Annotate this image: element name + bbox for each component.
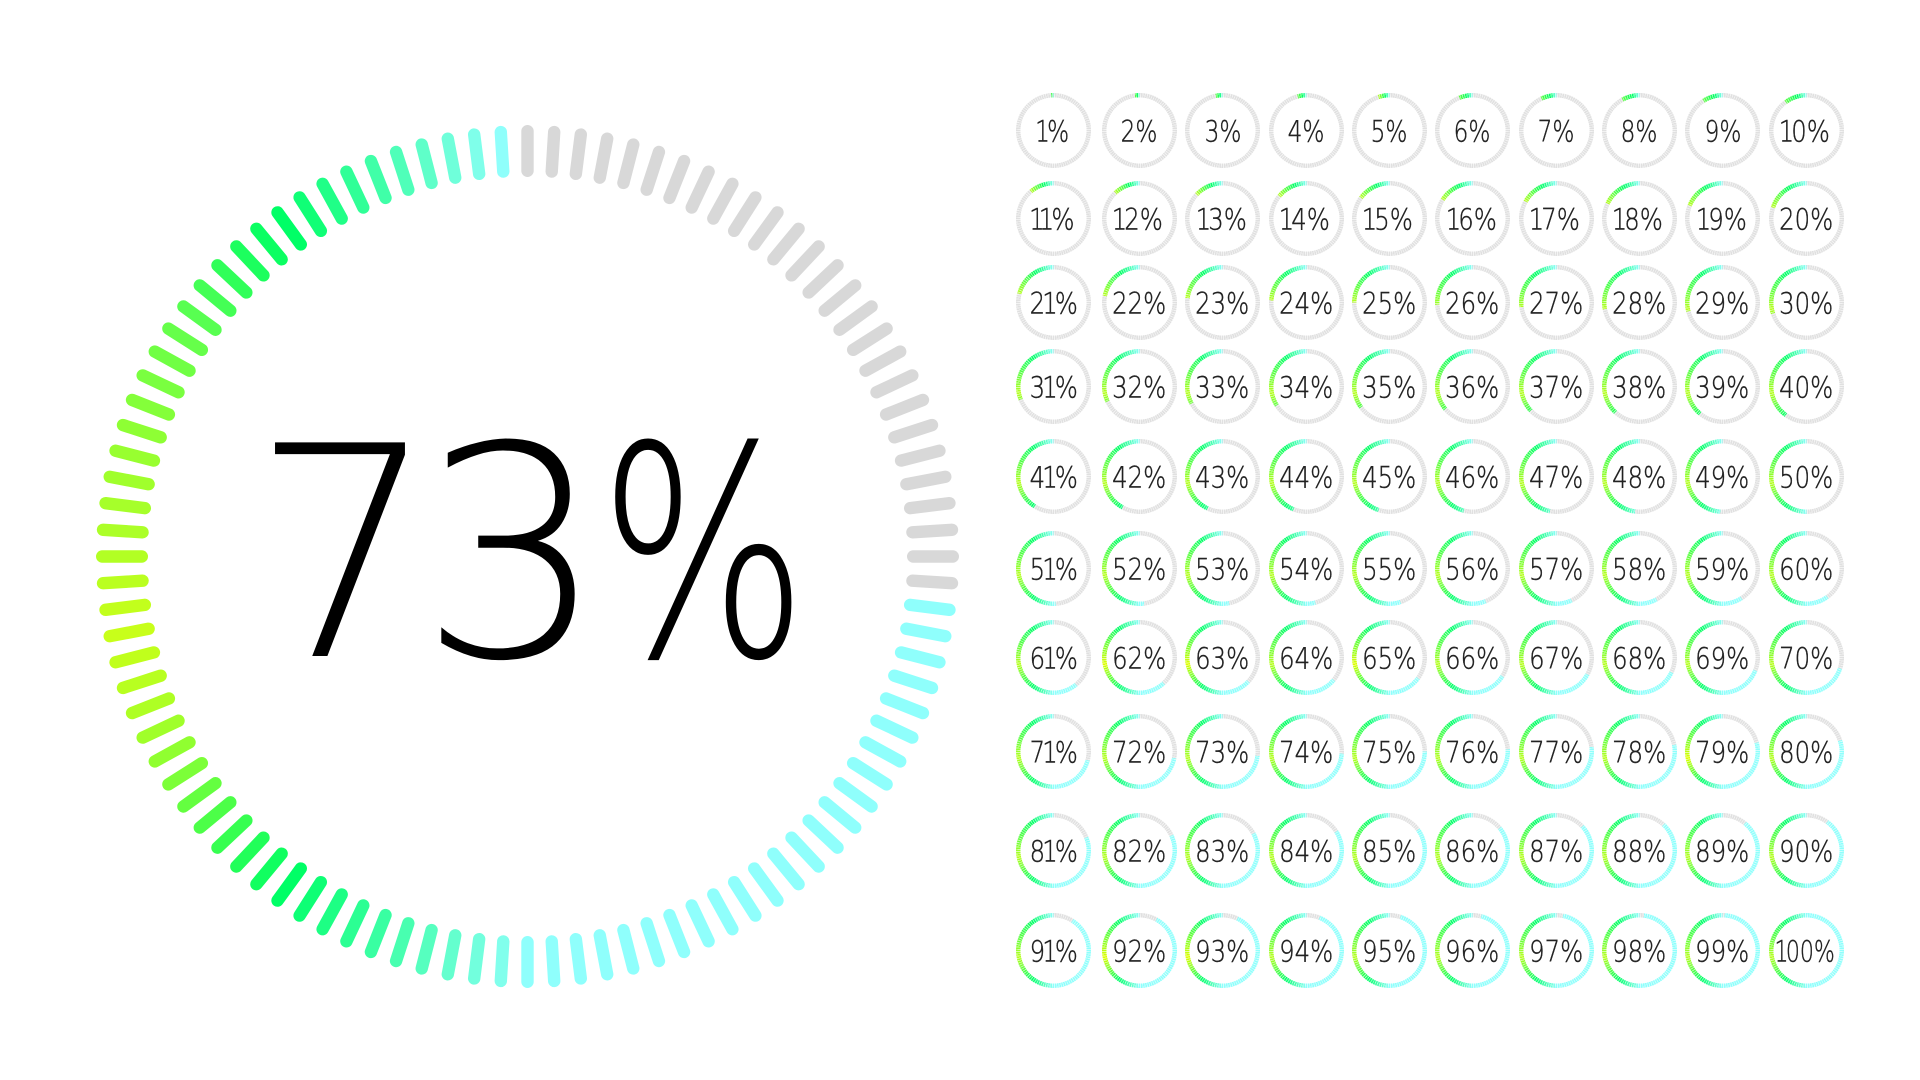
gauge 69%: 69%	[1696, 642, 1750, 676]
gauge 8%: 8%	[1621, 115, 1657, 149]
gauge 16%: 16%	[1445, 202, 1497, 236]
gauge 42%: 42%	[1112, 460, 1166, 494]
gauge 91%: 91%	[1030, 934, 1078, 968]
gauge 74%	[1268, 714, 1344, 789]
gauge 96%	[1435, 912, 1510, 988]
gauge 60%	[1768, 530, 1844, 606]
gauge 30%: 30%	[1779, 286, 1833, 320]
gauge grid: 1% to 100%	[1016, 93, 1844, 988]
gauge 81%: 81%	[1030, 834, 1078, 868]
gauge 56%	[1435, 530, 1510, 606]
large value: 73%	[251, 385, 808, 726]
gauge 53%: 53%	[1196, 552, 1250, 586]
gauge 27%	[1518, 265, 1594, 340]
gauge 37%: 37%	[1529, 370, 1583, 404]
gauge 84%: 84%	[1279, 834, 1333, 868]
gauge 61%: 61%	[1030, 642, 1078, 676]
gauge 73%	[1185, 714, 1260, 789]
gauge 53%	[1185, 530, 1260, 606]
gauge 18%: 18%	[1612, 202, 1663, 236]
gauge 30%	[1768, 265, 1844, 340]
gauge 1%	[1016, 93, 1091, 168]
gauge 99%	[1685, 912, 1760, 988]
gauge 28%	[1602, 265, 1676, 340]
gauge 48%	[1602, 438, 1676, 514]
gauge 31%: 31%	[1030, 370, 1078, 404]
gauge 47%: 47%	[1529, 460, 1583, 494]
gauge 24%: 24%	[1279, 286, 1333, 320]
gauge 99%: 99%	[1696, 934, 1750, 968]
gauge 81%	[1016, 812, 1091, 888]
large value: 73%: %	[599, 386, 808, 726]
gauge 71%: 71%	[1030, 736, 1078, 770]
gauge 29%: 29%	[1696, 286, 1750, 320]
gauge 59%	[1685, 530, 1760, 606]
gauge 78%: 78%	[1612, 736, 1666, 770]
gauge 66%	[1435, 620, 1510, 695]
gauge 59%: 59%	[1696, 552, 1750, 586]
gauge 12%	[1102, 180, 1176, 256]
gauge 7%	[1518, 93, 1594, 168]
gauge 76%	[1435, 714, 1510, 789]
gauge 57%: 57%	[1529, 552, 1583, 586]
gauge 100%: 100%	[1774, 934, 1835, 968]
gauge 37%	[1518, 348, 1594, 424]
gauge 5%	[1352, 93, 1426, 168]
gauge 80%: 80%	[1779, 736, 1833, 770]
gauge 70%: 70%	[1779, 642, 1833, 676]
gauge 91%	[1016, 912, 1091, 988]
gauge 66%: 66%	[1445, 642, 1500, 676]
gauge 47%	[1518, 438, 1594, 514]
gauge 9%	[1685, 93, 1760, 168]
gauge 57%	[1518, 530, 1594, 606]
gauge 24%	[1268, 265, 1344, 340]
gauge 74%: 74%	[1279, 736, 1333, 770]
gauge 36%	[1435, 348, 1510, 424]
gauge 20%	[1768, 180, 1844, 256]
gauge 97%	[1518, 912, 1594, 988]
gauge 17%	[1518, 180, 1594, 256]
gauge 35%	[1352, 348, 1426, 424]
gauge 63%: 63%	[1196, 642, 1250, 676]
gauge 56%: 56%	[1445, 552, 1500, 586]
gauge 51%: 51%	[1030, 552, 1078, 586]
gauge 4%	[1268, 93, 1344, 168]
gauge 90%	[1768, 812, 1844, 888]
gauge 32%	[1102, 348, 1176, 424]
gauge 67%	[1518, 620, 1594, 695]
gauge 15%	[1352, 180, 1426, 256]
gauge 43%	[1185, 438, 1260, 514]
gauge 86%	[1435, 812, 1510, 888]
gauge 26%	[1435, 265, 1510, 340]
gauge 68%	[1602, 620, 1676, 695]
gauge 10%	[1768, 93, 1844, 168]
gauge 86%: 86%	[1445, 834, 1500, 868]
gauge 4%: 4%	[1288, 115, 1324, 149]
gauge 64%: 64%	[1279, 642, 1333, 676]
gauge 27%: 27%	[1529, 286, 1583, 320]
gauge 55%	[1352, 530, 1426, 606]
gauge 16%	[1435, 180, 1510, 256]
gauge 15%: 15%	[1362, 202, 1413, 236]
gauge 34%: 34%	[1279, 370, 1333, 404]
gauge 3%	[1185, 93, 1260, 168]
gauge 52%: 52%	[1112, 552, 1166, 586]
gauge 87%: 87%	[1529, 834, 1583, 868]
gauge 33%: 33%	[1196, 370, 1250, 404]
gauge 40%: 40%	[1779, 370, 1833, 404]
gauge 75%: 75%	[1362, 736, 1416, 770]
gauge 60%: 60%	[1779, 552, 1833, 586]
gauge 10%: 10%	[1779, 115, 1830, 149]
gauge 92%	[1102, 912, 1176, 988]
gauge 87%	[1518, 812, 1594, 888]
gauge 72%	[1102, 714, 1176, 789]
gauge 21%: 21%	[1030, 286, 1078, 320]
gauge 33%	[1185, 348, 1260, 424]
gauge 54%: 54%	[1279, 552, 1333, 586]
gauge 2%: 2%	[1121, 115, 1157, 149]
gauge 54%	[1268, 530, 1344, 606]
gauge 79%	[1685, 714, 1760, 789]
gauge 46%	[1435, 438, 1510, 514]
gauge 72%: 72%	[1112, 736, 1166, 770]
gauge 55%: 55%	[1362, 552, 1416, 586]
gauge 45%: 45%	[1362, 460, 1416, 494]
large value: 73%: 7	[251, 385, 437, 726]
gauge 52%	[1102, 530, 1176, 606]
gauge 19%	[1685, 180, 1760, 256]
gauge 29%	[1685, 265, 1760, 340]
gauge 51%	[1016, 530, 1091, 606]
large gauge: 73 percent	[96, 125, 959, 988]
gauge 41%: 41%	[1030, 460, 1078, 494]
gauge 88%	[1602, 812, 1676, 888]
gauge 76%: 76%	[1445, 736, 1500, 770]
gauge 82%	[1102, 812, 1176, 888]
gauge 23%: 23%	[1196, 286, 1250, 320]
gauge 42%	[1102, 438, 1176, 514]
gauge 17%: 17%	[1529, 202, 1580, 236]
gauge 48%: 48%	[1612, 460, 1666, 494]
gauge 90%: 90%	[1779, 834, 1833, 868]
gauge 22%	[1102, 265, 1176, 340]
gauge 96%: 96%	[1445, 934, 1500, 968]
gauge 8%	[1602, 93, 1676, 168]
gauge 38%	[1602, 348, 1676, 424]
gauge 65%	[1352, 620, 1426, 695]
gauge 14%	[1268, 180, 1344, 256]
gauge 92%: 92%	[1112, 934, 1166, 968]
gauge 39%: 39%	[1696, 370, 1750, 404]
gauge 36%: 36%	[1445, 370, 1500, 404]
gauge 12%: 12%	[1112, 202, 1163, 236]
gauge 5%: 5%	[1371, 115, 1407, 149]
gauge 19%: 19%	[1696, 202, 1747, 236]
gauge 2%	[1102, 93, 1176, 168]
gauge 94%	[1268, 912, 1344, 988]
gauge 77%	[1518, 714, 1594, 789]
gauge 89%: 89%	[1696, 834, 1750, 868]
gauge 31%	[1016, 348, 1091, 424]
gauge 98%	[1602, 912, 1676, 988]
gauge 85%: 85%	[1362, 834, 1416, 868]
gauge 75%	[1352, 714, 1426, 789]
gauge 82%: 82%	[1112, 834, 1166, 868]
gauge 58%: 58%	[1612, 552, 1666, 586]
gauge 49%	[1685, 438, 1760, 514]
gauge 64%	[1268, 620, 1344, 695]
gauge 44%: 44%	[1279, 460, 1333, 494]
gauge 70%	[1768, 620, 1844, 695]
gauge 83%	[1185, 812, 1260, 888]
gauge 93%: 93%	[1196, 934, 1250, 968]
gauge 80%	[1768, 714, 1844, 789]
gauge 6%	[1435, 93, 1510, 168]
gauge 63%	[1185, 620, 1260, 695]
gauge 21%	[1016, 265, 1091, 340]
gauge 13%: 13%	[1196, 202, 1247, 236]
gauge 95%	[1352, 912, 1426, 988]
gauge 71%	[1016, 714, 1091, 789]
gauge 95%: 95%	[1362, 934, 1416, 968]
gauge 50%: 50%	[1779, 460, 1833, 494]
gauge 77%: 77%	[1529, 736, 1583, 770]
tick ring	[96, 125, 959, 988]
gauge 58%	[1602, 530, 1676, 606]
gauge 9%: 9%	[1704, 115, 1741, 149]
gauge 50%	[1768, 438, 1844, 514]
gauge 3%: 3%	[1204, 115, 1241, 149]
gauge 23%	[1185, 265, 1260, 340]
gauge 88%: 88%	[1612, 834, 1666, 868]
gauge 39%	[1685, 348, 1760, 424]
gauge 22%: 22%	[1112, 286, 1166, 320]
gauge 25%: 25%	[1362, 286, 1416, 320]
gauge 46%: 46%	[1445, 460, 1500, 494]
gauge 65%: 65%	[1362, 642, 1416, 676]
gauge 98%: 98%	[1612, 934, 1666, 968]
gauge 62%	[1102, 620, 1176, 695]
gauge 44%	[1268, 438, 1344, 514]
gauge 32%: 32%	[1112, 370, 1166, 404]
gauge 28%: 28%	[1612, 286, 1666, 320]
gauge 89%	[1685, 812, 1760, 888]
gauge 18%	[1602, 180, 1676, 256]
gauge 35%: 35%	[1362, 370, 1416, 404]
gauge 41%	[1016, 438, 1091, 514]
gauge 62%: 62%	[1112, 642, 1166, 676]
gauge 67%: 67%	[1529, 642, 1583, 676]
gauge 97%: 97%	[1529, 934, 1583, 968]
gauge 68%: 68%	[1612, 642, 1666, 676]
gauge 45%	[1352, 438, 1426, 514]
gauge 49%: 49%	[1696, 460, 1750, 494]
gauge 84%	[1268, 812, 1344, 888]
gauge 83%: 83%	[1196, 834, 1250, 868]
gauge 61%	[1016, 620, 1091, 695]
gauge 1%: 1%	[1035, 115, 1069, 149]
gauge 79%: 79%	[1696, 736, 1750, 770]
gauge 26%: 26%	[1445, 286, 1500, 320]
gauge 85%	[1352, 812, 1426, 888]
gauge 38%: 38%	[1612, 370, 1666, 404]
gauge 20%: 20%	[1779, 202, 1833, 236]
gauge 78%	[1602, 714, 1676, 789]
gauge 14%: 14%	[1279, 202, 1330, 236]
gauge 43%: 43%	[1196, 460, 1250, 494]
gauge 13%	[1185, 180, 1260, 256]
gauge 11%	[1016, 180, 1091, 256]
gauge 69%	[1685, 620, 1760, 695]
gauge 94%: 94%	[1279, 934, 1333, 968]
gauge 11%: 11%	[1030, 202, 1075, 236]
gauge 73%: 73%	[1196, 736, 1250, 770]
gauge 100%	[1768, 912, 1844, 988]
gauge 6%: 6%	[1454, 115, 1491, 149]
gauge 7%: 7%	[1538, 115, 1574, 149]
gauge 93%	[1185, 912, 1260, 988]
large value: 73%: 3	[419, 385, 605, 726]
gauge 25%	[1352, 265, 1426, 340]
gauge 34%	[1268, 348, 1344, 424]
gauge 40%	[1768, 348, 1844, 424]
